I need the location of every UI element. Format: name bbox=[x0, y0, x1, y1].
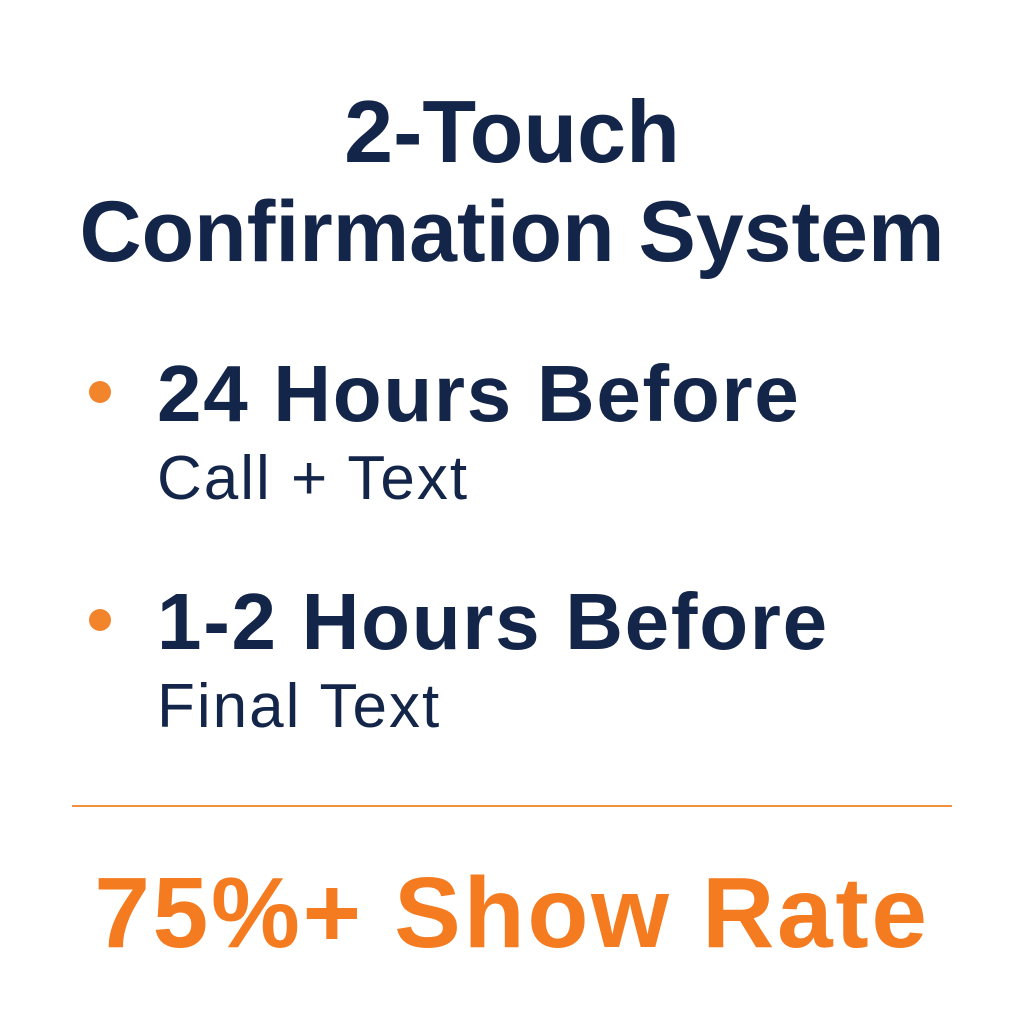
icon: bullet dot bbox=[89, 381, 111, 403]
subtitle title line: Confirmation System bbox=[80, 184, 944, 280]
result callout: 75%+ Show Rate bbox=[94, 857, 930, 969]
title: 2-Touch bbox=[344, 82, 680, 181]
icon: bullet dot bbox=[89, 609, 111, 631]
step 2 detail: Final Text bbox=[157, 672, 441, 741]
step 1 detail: Call + Text bbox=[157, 444, 469, 513]
step 1 bbox=[89, 349, 800, 513]
step 2 heading: 1-2 Hours Before bbox=[157, 577, 829, 666]
step 1 heading: 24 Hours Before bbox=[157, 349, 800, 438]
step 2 bbox=[89, 577, 829, 741]
